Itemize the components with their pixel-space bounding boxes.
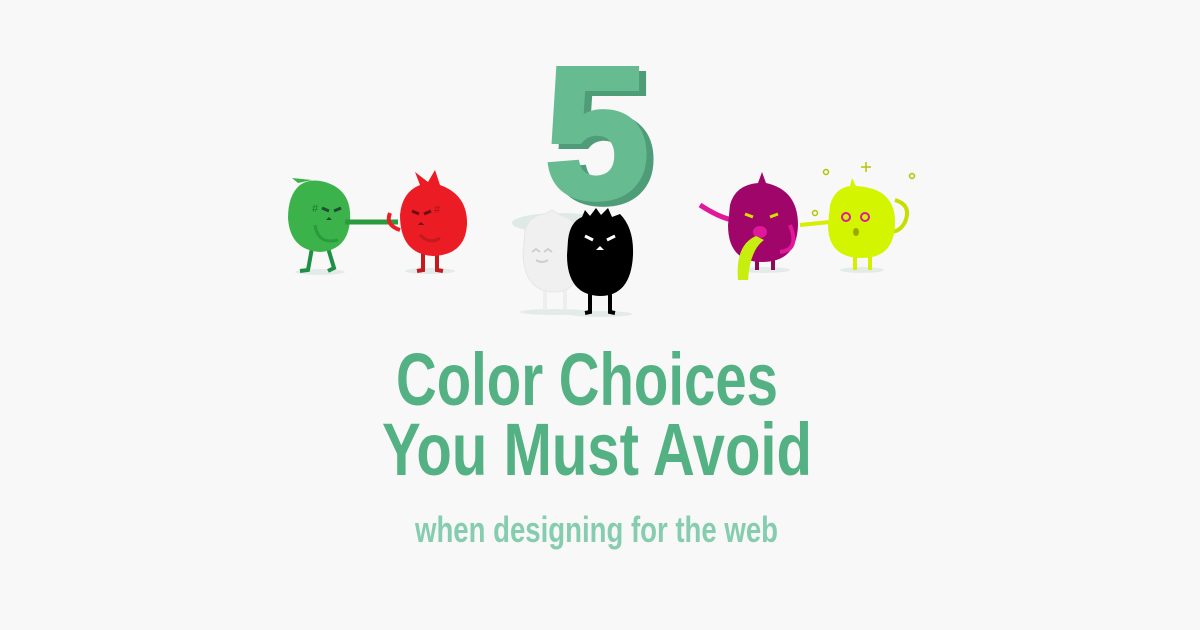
character: green angry: #	[312, 203, 319, 215]
number 5: 5	[552, 35, 656, 242]
subtitle: when designing for the web	[414, 509, 778, 550]
title line 1: Color Choices	[396, 338, 778, 421]
character: black grumpy	[567, 208, 633, 317]
number 5: 5	[545, 30, 649, 237]
character: red angry	[389, 170, 467, 274]
title line 2: You Must Avoid	[382, 408, 812, 491]
character: red angry: #	[434, 204, 441, 216]
character: green angry	[288, 178, 398, 275]
character: white ghost	[520, 210, 590, 315]
character: yellow dizzy	[800, 162, 914, 273]
character: purple sick	[700, 172, 798, 280]
